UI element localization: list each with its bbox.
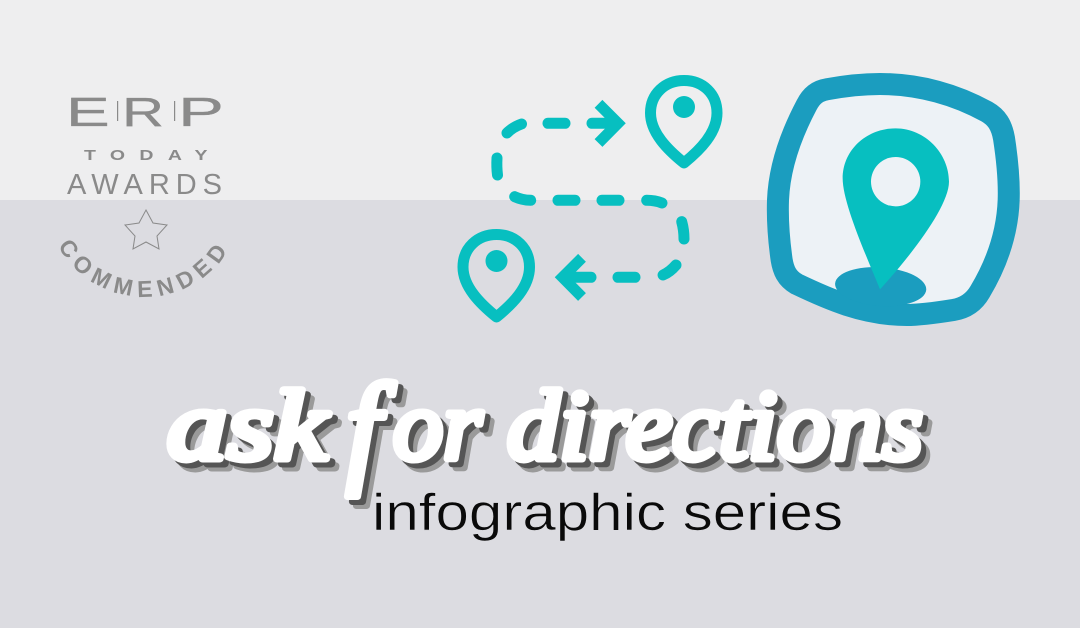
title: ask for directions	[167, 360, 932, 507]
title: ask for directions: or	[402, 379, 492, 490]
arrow: toward origin pin	[562, 258, 591, 297]
TODAY label: TODAY	[84, 146, 208, 163]
background: lower grey band	[0, 200, 1080, 628]
title: ask for directions: or	[398, 375, 488, 486]
subtitle: infographic series: infographic series	[372, 484, 843, 542]
icon: star outline	[125, 210, 167, 249]
title: ask for directions: directions	[512, 375, 928, 486]
title: ask for directions: f	[346, 360, 396, 498]
title: ask for directions: directions	[507, 370, 923, 481]
ERP logo wordmark: R	[122, 89, 164, 135]
title: ask for directions: f	[355, 369, 405, 507]
map pin badge	[778, 84, 1009, 315]
title: ask for directions: ask	[172, 375, 334, 486]
title: ask for directions: f	[351, 365, 401, 503]
AWARDS label: AWARDS	[67, 169, 222, 201]
arrow: toward destination pin	[592, 104, 618, 143]
COMMENDED curved label: COMMENDED	[60, 240, 224, 298]
icon: large map pin	[843, 128, 949, 289]
dashed route line	[497, 123, 684, 277]
title: ask for directions: directions	[516, 379, 932, 490]
title: ask for directions: ask	[167, 370, 329, 481]
icon: destination pin	[650, 80, 717, 163]
pin shadow ellipse	[834, 264, 928, 309]
ERP logo wordmark: P	[178, 90, 224, 135]
badge blob frame	[778, 84, 1009, 315]
icon: origin pin	[463, 234, 530, 317]
ERP logo wordmark: E	[66, 89, 110, 135]
award badge: ERP Today Awards commended	[60, 89, 224, 298]
route illustration: two pins joined by dashed path	[463, 80, 717, 317]
ERP logo wordmark	[66, 89, 224, 135]
title: ask for directions: or	[393, 370, 483, 481]
title: ask for directions: ask	[176, 379, 338, 490]
background: upper light band	[0, 0, 1080, 200]
